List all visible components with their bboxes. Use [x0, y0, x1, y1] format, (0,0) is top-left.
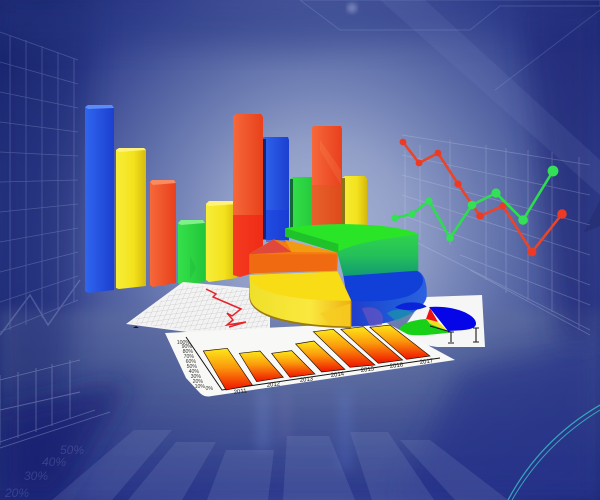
line chart grid panel	[402, 135, 590, 335]
paper chart bars	[203, 325, 430, 390]
3D pie chart	[249, 224, 427, 328]
mini pie chart	[400, 307, 476, 335]
bar: blue back	[262, 137, 289, 242]
paper chart percent labels: 60%	[186, 359, 196, 365]
floor axis labels: 30%	[24, 469, 48, 483]
paper: line chart sheet	[126, 282, 270, 334]
pie slice: yellow	[249, 272, 351, 328]
bar: green back	[290, 177, 317, 230]
paper chart percent labels: 20%	[193, 379, 203, 385]
paper chart percent labels	[177, 340, 213, 392]
bar: red back	[312, 126, 342, 228]
paper chart percent labels: 90%	[182, 344, 192, 350]
teal arc	[508, 405, 600, 500]
floor axis labels: 20%	[4, 486, 29, 500]
bar: red front tall	[233, 114, 263, 277]
left wall grid	[0, 32, 80, 335]
mini pie leader lines	[430, 326, 479, 343]
floor axis labels: 40%	[42, 455, 66, 469]
pie slice: orange	[249, 239, 338, 273]
paper chart percent labels: 80%	[183, 349, 193, 355]
bar: yellow back	[342, 176, 367, 228]
bar: orange-red	[150, 180, 176, 287]
paper chart axes	[186, 337, 440, 390]
paper chart year labels: 2011	[234, 388, 248, 396]
perspective floor bars	[52, 430, 508, 500]
light streaks	[258, 390, 350, 470]
paper chart percent labels: 30%	[191, 374, 201, 380]
bar: yellow short	[206, 201, 237, 282]
pie slice: green	[285, 224, 418, 276]
paper: pie chart sheet	[395, 295, 485, 347]
paper chart year labels: 2017	[420, 358, 434, 366]
bar: yellow	[116, 148, 146, 289]
paper chart percent labels: 100%	[177, 340, 190, 346]
paper chart year labels: 2015	[361, 366, 375, 374]
bar: blue	[85, 105, 114, 293]
bar: green	[178, 220, 205, 285]
paper chart year labels: 2012	[267, 381, 281, 389]
line chart	[391, 139, 567, 256]
paper chart percent labels: 0%	[206, 386, 213, 392]
line: green series	[391, 166, 558, 242]
paper: bar chart sheet	[165, 322, 455, 396]
paper chart percent labels: 50%	[187, 364, 197, 370]
floor axis labels: 50%	[60, 443, 84, 457]
back bar group	[233, 114, 367, 277]
paper chart year labels	[234, 358, 434, 396]
paper chart percent labels: 10%	[195, 384, 205, 390]
left bar group	[85, 105, 237, 293]
paper chart percent labels: 70%	[184, 354, 194, 360]
paper chart year labels: 2013	[300, 376, 314, 384]
left floor grid	[0, 360, 110, 448]
paper chart percent labels: 40%	[189, 369, 199, 375]
line: red series	[400, 139, 567, 256]
pie slice: blue	[343, 271, 427, 327]
floor axis labels	[4, 443, 84, 500]
paper chart year labels: 2016	[390, 362, 404, 370]
paper chart year labels: 2014	[331, 371, 345, 379]
